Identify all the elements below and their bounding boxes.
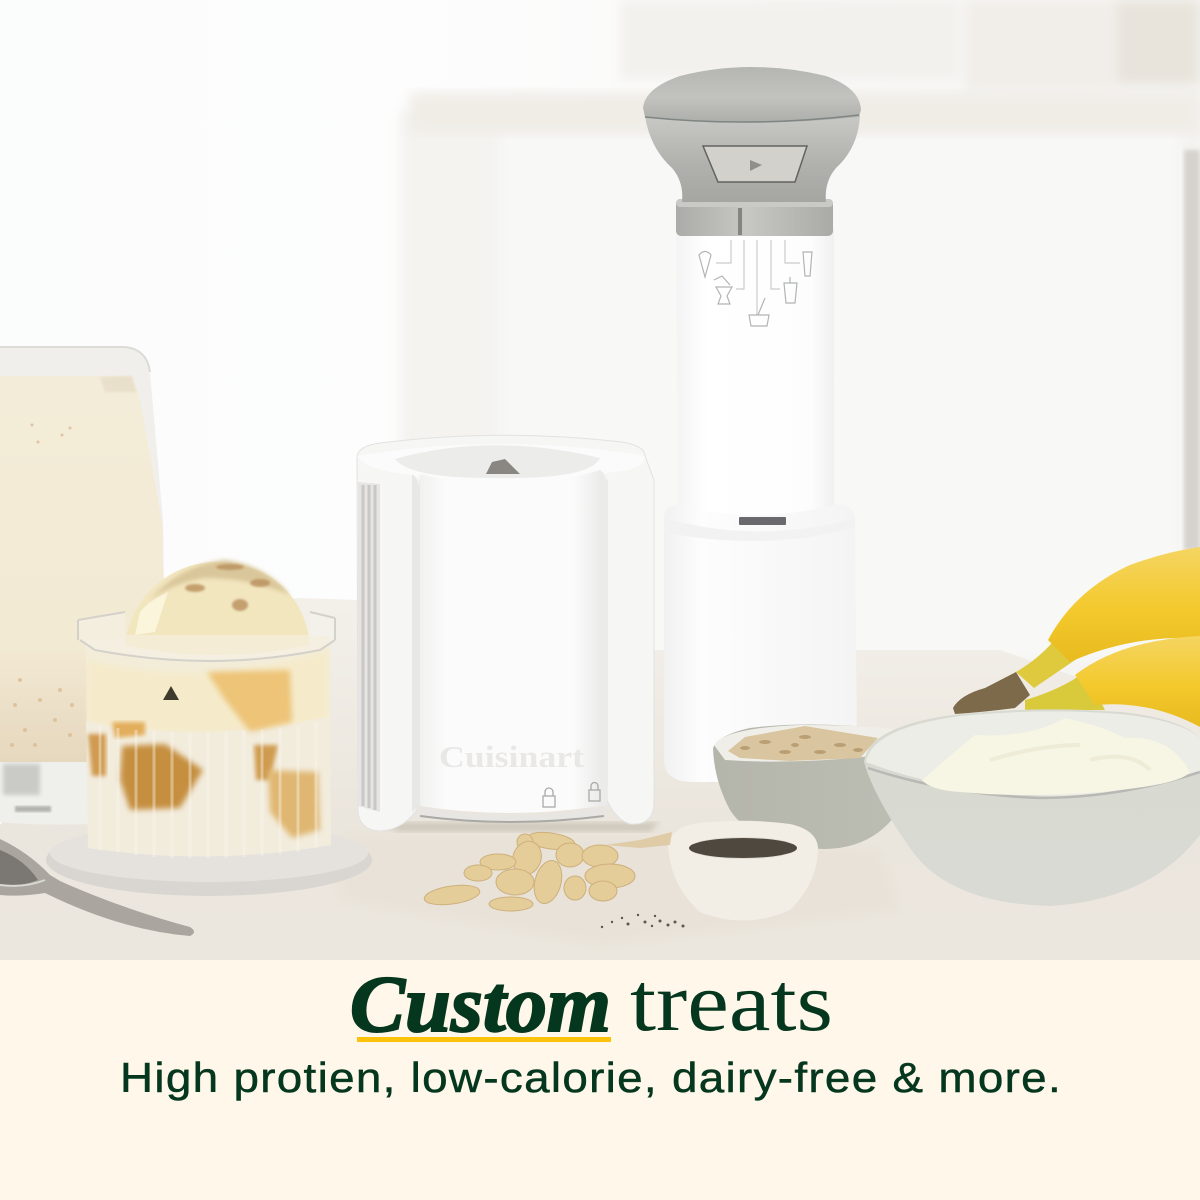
- spoon: [0, 839, 194, 936]
- motor tower: grey collar: [676, 199, 833, 236]
- treat icons and connectors: [699, 240, 812, 326]
- heading: Custom treats: Custom: [350, 961, 611, 1049]
- lid plate under ice cream cup: [46, 824, 372, 896]
- motor tower: lower base: [664, 504, 857, 782]
- yogurt bowl: [864, 709, 1200, 906]
- play button: [703, 146, 807, 182]
- countertop: [0, 598, 1200, 960]
- scattered chia seeds: [601, 914, 684, 928]
- smoothie speckles: [10, 424, 74, 747]
- heading: Custom treats: [350, 956, 833, 1049]
- chia bowl: [668, 821, 818, 921]
- heading: Custom treats: treats: [630, 956, 833, 1049]
- clear plastic rim: [78, 612, 335, 661]
- blender jar base: [357, 435, 660, 832]
- smoothie glass: [0, 347, 164, 825]
- loose oats: [605, 832, 672, 848]
- glass base: [0, 762, 86, 824]
- jar shadow: [372, 822, 660, 832]
- peanuts pile: [423, 830, 635, 911]
- motor tower: grey cap: [643, 67, 861, 202]
- brand wordmark on jar: Cuisinart: [439, 739, 585, 774]
- bananas: [953, 547, 1200, 727]
- subheading: High protien, low-calorie, dairy-free & more.: [120, 1054, 1062, 1101]
- heading underline: [357, 1037, 611, 1042]
- lock icons: [543, 783, 600, 807]
- ice cream scoop: [125, 562, 310, 655]
- ice cream pint cup: [78, 560, 335, 858]
- cup flutes: [100, 722, 316, 858]
- blurred kitchen background: [0, 0, 1200, 960]
- caption band: [0, 960, 1200, 1200]
- oats bowl: [713, 724, 905, 849]
- motor tower: white body: [676, 228, 834, 515]
